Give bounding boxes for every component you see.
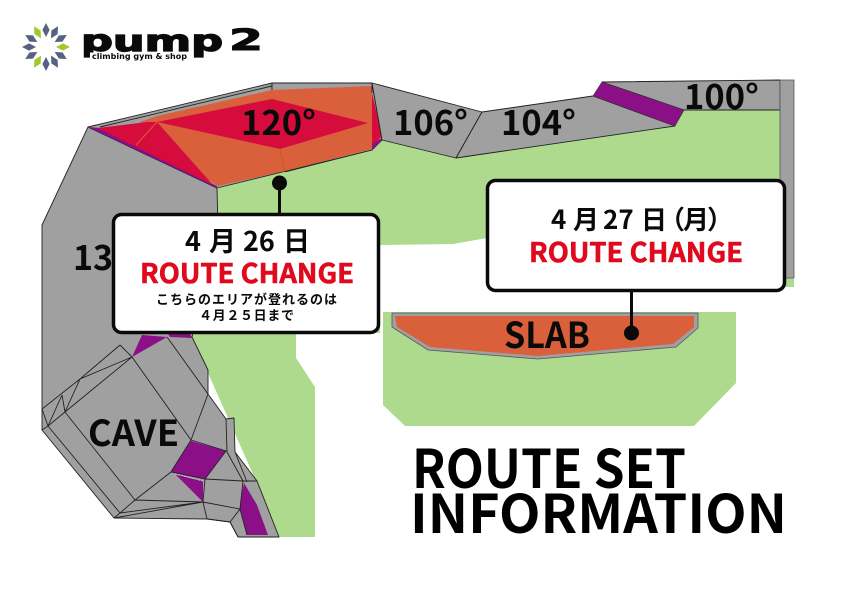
callout note line 2: ４月２５日まで (199, 305, 294, 324)
callout date: 27 (603, 200, 634, 237)
slab orange route area (395, 316, 694, 356)
title: INFORMATION (410, 473, 787, 549)
callout date: 日 (641, 200, 667, 237)
wall: 104 degree (456, 96, 675, 158)
cave facet lines (42, 337, 257, 537)
icon: logo star (22, 23, 70, 71)
label: 100 degrees: 100° (684, 70, 759, 119)
connector: slab to callout (624, 290, 639, 340)
cave purple holds (132, 334, 268, 535)
callout route change heading: ROUTE CHANGE (140, 252, 354, 291)
wall: 120 degree (88, 83, 382, 188)
label: slab: SLAB (504, 307, 590, 359)
logo tagline text: climbing gym & shop (92, 52, 187, 61)
callout date: 日 (283, 220, 310, 259)
logo: pump2 climbing gym and shop (22, 23, 263, 71)
logo wordmark: pump (81, 24, 223, 58)
label: 104 degrees: 104° (501, 96, 576, 145)
callout route change heading: ROUTE CHANGE (529, 231, 743, 270)
title (410, 428, 787, 549)
purple strip (88, 127, 217, 188)
title: ROUTE SET (412, 428, 686, 504)
callout date: 月 (573, 200, 599, 237)
label: 130 degrees: 130° (73, 231, 147, 280)
purple edge (372, 138, 382, 150)
label: 106 degrees: 106° (393, 96, 468, 145)
callout note line 1: こちらのエリアが登れるのは (156, 289, 337, 308)
logo tagline (90, 52, 188, 60)
callout date: （ (659, 200, 685, 237)
wall map (42, 80, 794, 537)
wall: 100 degree (602, 80, 780, 110)
orange route area (140, 86, 372, 186)
floor area: slab green (383, 312, 736, 426)
label: 120 degrees: 120° (241, 96, 316, 145)
wall: purple strip (593, 82, 684, 126)
logo numeral: 2 (229, 23, 263, 57)
label: cave: CAVE (88, 405, 179, 457)
callout date: 4 (551, 200, 566, 237)
callout date: ） (707, 200, 733, 237)
red route areas (98, 93, 382, 185)
wall: 106 degree (372, 83, 482, 158)
connector: 120 degree wall to callout (272, 176, 287, 215)
wall: slab (392, 313, 698, 359)
wall: 130 degree and cave (42, 127, 279, 537)
floor area: upper and left green (192, 110, 794, 537)
wall: right side strip (780, 80, 794, 278)
callout date: 4 (185, 220, 201, 259)
callout date: 月 (209, 220, 236, 259)
callout date: 月 (683, 200, 709, 237)
callout: April 26 route change (114, 214, 378, 332)
callout date: 26 (243, 220, 275, 259)
callout: April 27 route change (488, 180, 784, 290)
